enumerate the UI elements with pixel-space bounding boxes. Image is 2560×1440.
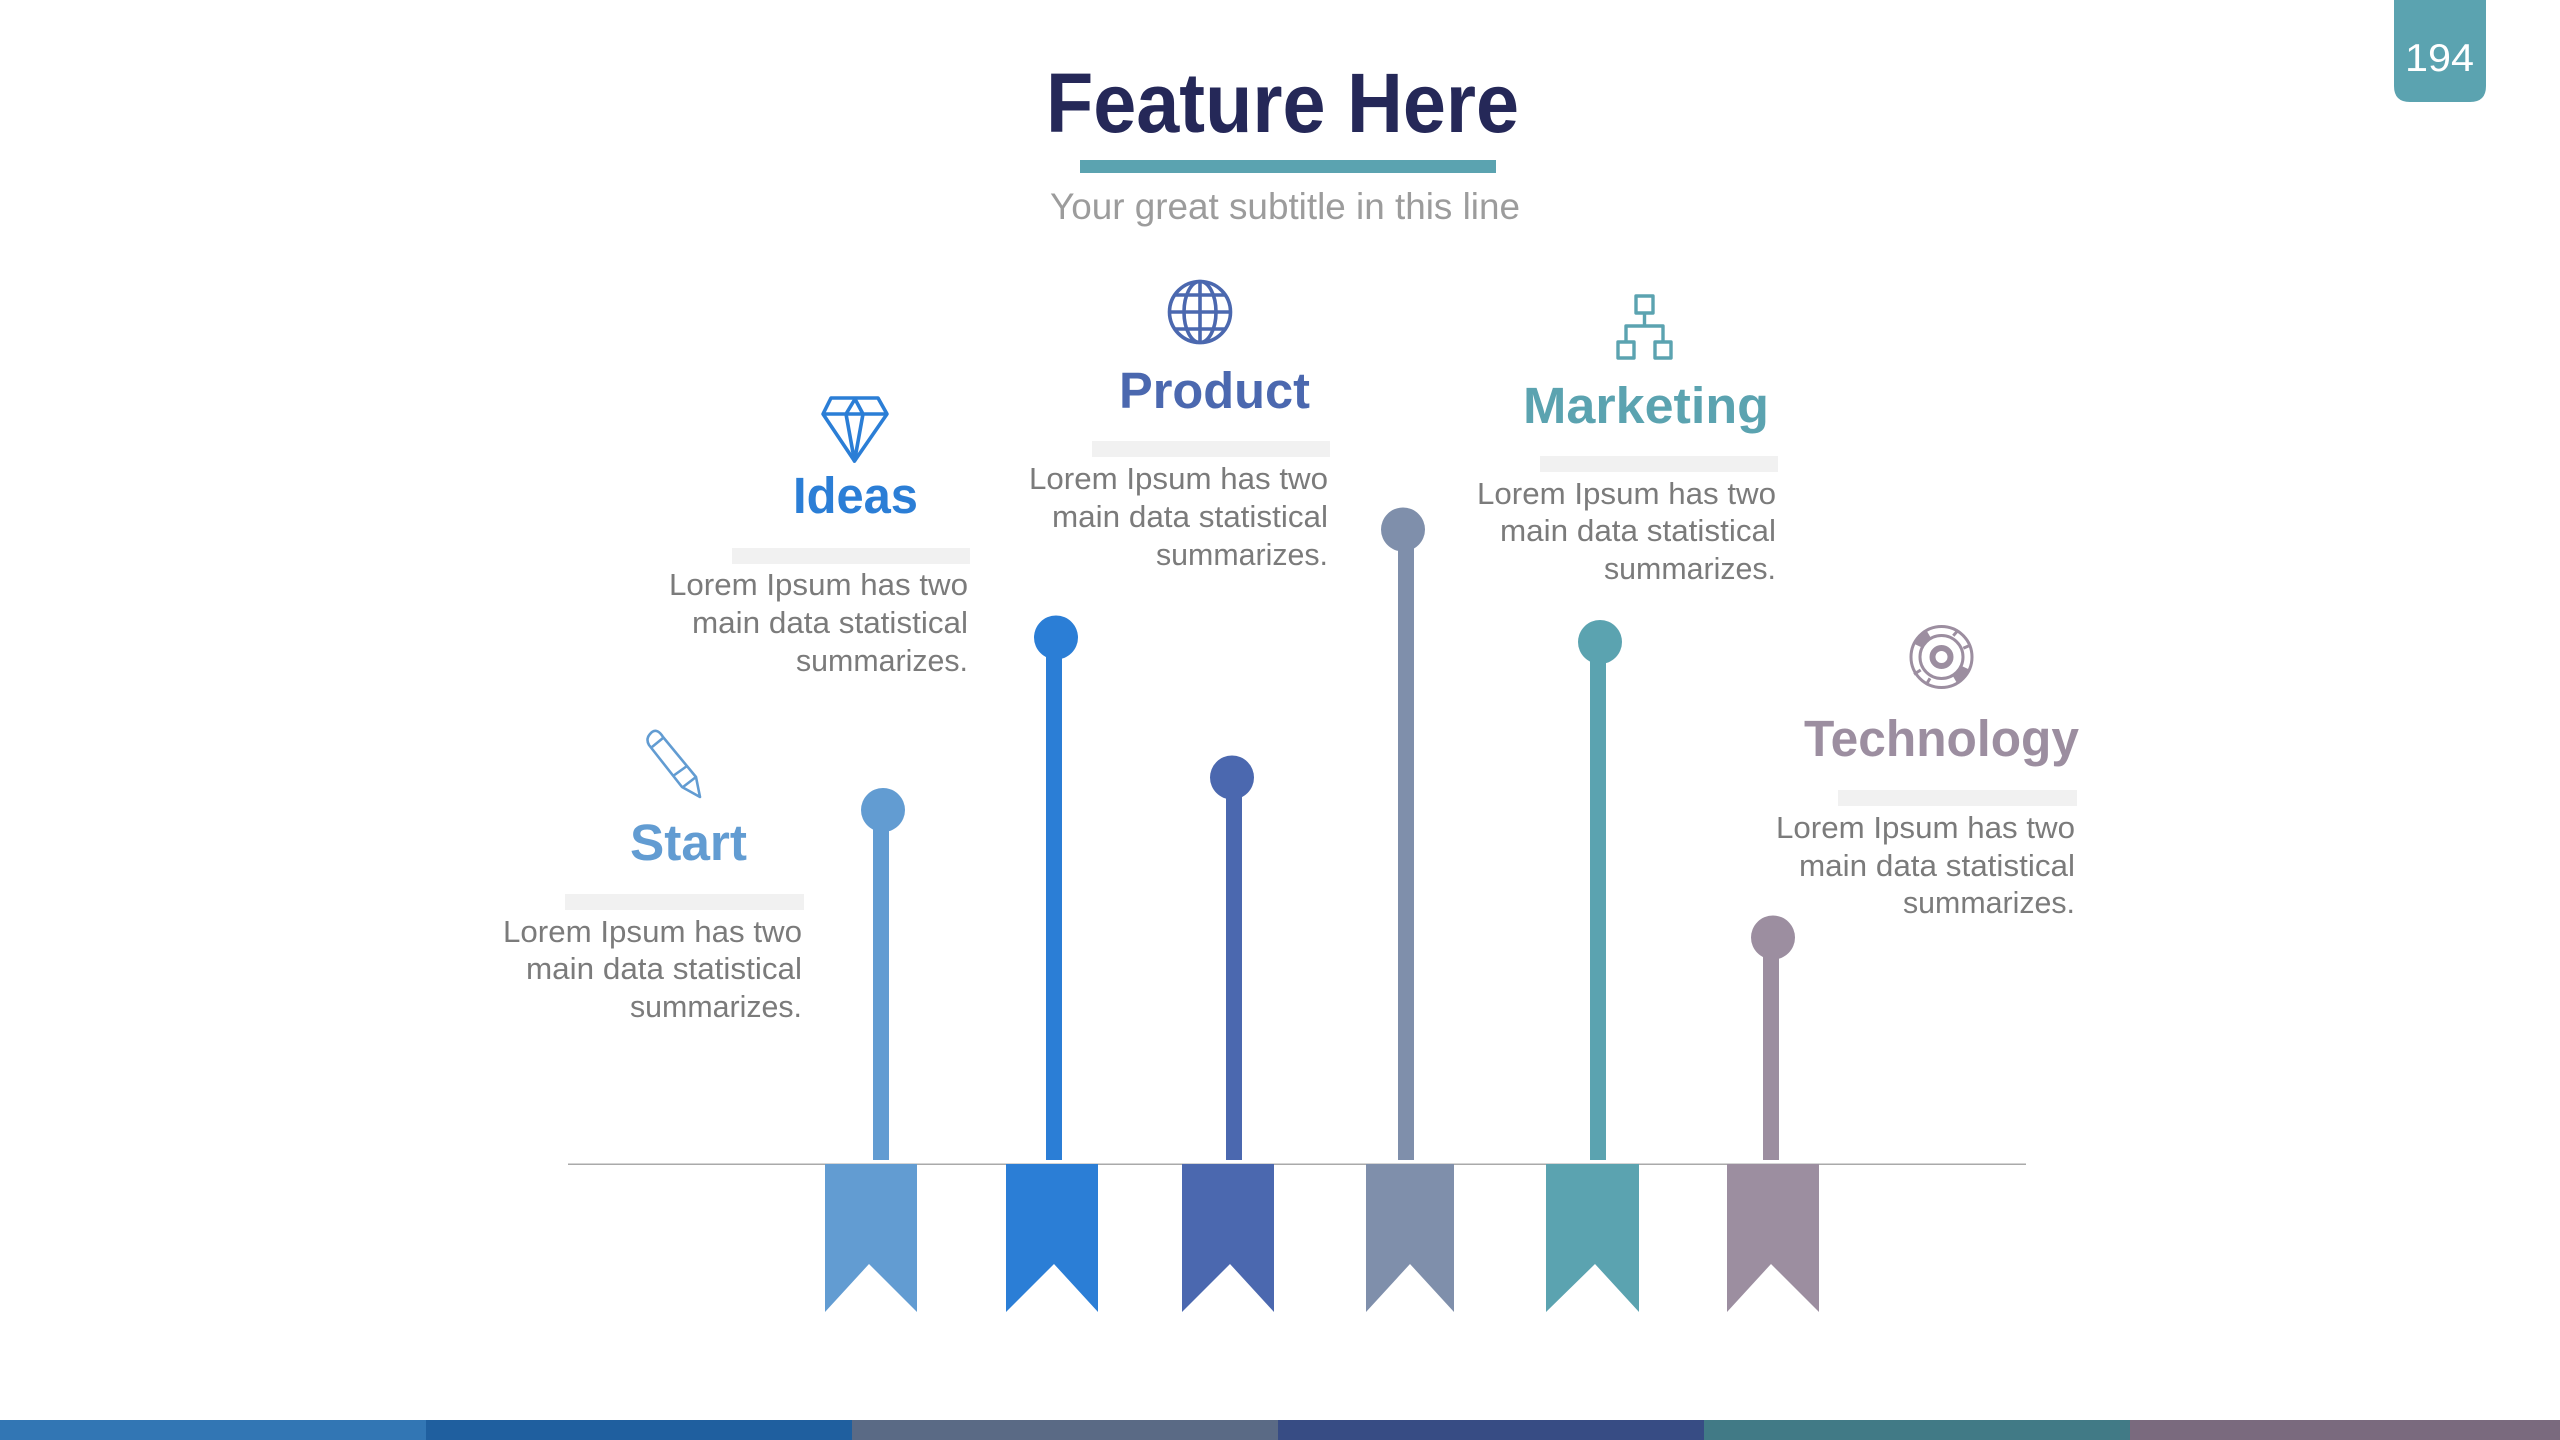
panel: product <box>1029 282 1330 572</box>
title: Feature Here <box>1046 56 1519 150</box>
subtitle: Your great subtitle in this line <box>1050 186 1520 227</box>
body text: main data statistical <box>1799 848 2075 883</box>
highlight bar <box>1540 456 1778 472</box>
body text: summarizes. <box>796 643 968 678</box>
body text <box>1477 476 1776 586</box>
pin and banner: marketing <box>1546 620 1639 1312</box>
heading: ideas: Ideas <box>793 467 918 524</box>
page number tab <box>2394 0 2486 102</box>
page number tab: 194 <box>2405 37 2474 80</box>
body text: Lorem Ipsum has two <box>1477 476 1776 511</box>
body text: main data statistical <box>1500 513 1776 548</box>
body text <box>1029 461 1328 572</box>
pin and banner: feature <box>1366 508 1454 1312</box>
body text: main data statistical <box>692 605 968 640</box>
pin and banner: ideas <box>1006 616 1098 1312</box>
pin and banner: technology <box>1727 916 1819 1312</box>
heading: marketing: Marketing <box>1523 377 1769 434</box>
highlight bar <box>1092 441 1330 457</box>
pin and banner: start <box>825 788 917 1312</box>
body text: Lorem Ipsum has two <box>1029 461 1328 496</box>
footer colour strip <box>0 1420 2560 1440</box>
panel: marketing <box>1477 296 1778 586</box>
body text: summarizes. <box>1903 885 2075 920</box>
body text: Lorem Ipsum has two <box>669 567 968 602</box>
heading: start: Start <box>630 814 747 871</box>
body text <box>503 914 802 1024</box>
highlight bar <box>732 548 970 564</box>
body text: Lorem Ipsum has two <box>1776 810 2075 845</box>
highlight bar <box>565 894 804 910</box>
pin and banner: product <box>1182 756 1274 1312</box>
panel: start <box>503 731 804 1024</box>
icon: diamond <box>823 398 887 461</box>
icon: org chart <box>1618 296 1671 358</box>
body text: summarizes. <box>1156 537 1328 572</box>
body text <box>669 567 968 678</box>
body text <box>1776 810 2075 920</box>
body text: main data statistical <box>526 951 802 986</box>
body text: summarizes. <box>1604 551 1776 586</box>
icon: globe <box>1170 282 1230 342</box>
heading: technology: Technology <box>1804 710 2080 767</box>
panel: ideas <box>669 398 970 678</box>
icon: pencil <box>647 731 700 797</box>
title underline <box>1080 160 1496 173</box>
body text: main data statistical <box>1052 499 1328 534</box>
body text: summarizes. <box>630 989 802 1024</box>
icon: target disc <box>1911 626 1972 688</box>
highlight bar <box>1838 790 2077 806</box>
body text: Lorem Ipsum has two <box>503 914 802 949</box>
baseline rule <box>568 1164 2026 1165</box>
heading: product: Product <box>1119 362 1310 419</box>
panel: technology <box>1776 626 2080 920</box>
